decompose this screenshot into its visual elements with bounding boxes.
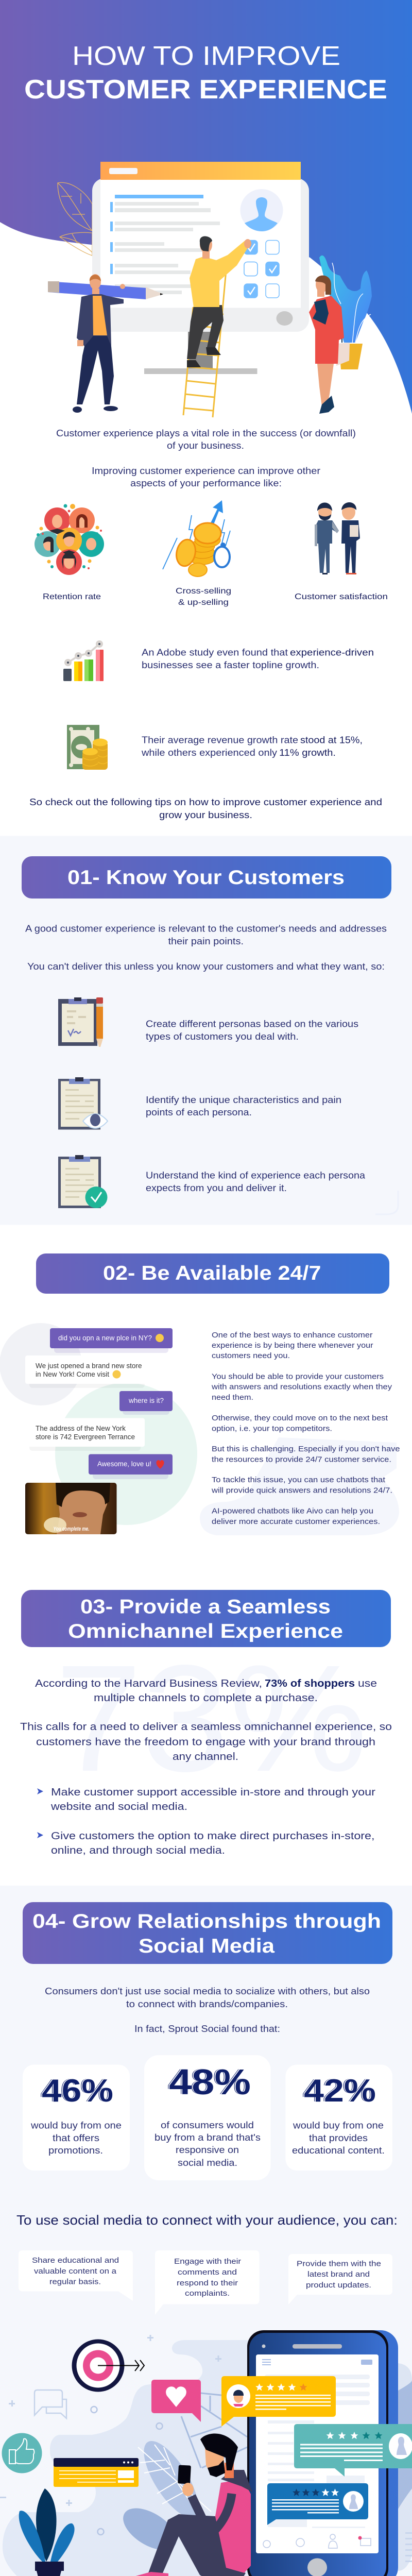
icon: cash and coins <box>67 725 108 770</box>
speech bubble: updates: Provide them with the <box>297 2260 381 2268</box>
text: revenue growth: while others experienced only <box>141 748 277 758</box>
text column: experience is by being there whenever your <box>212 1341 373 1350</box>
heading: 03- Provide a Seamless <box>80 1596 331 1618</box>
background shape <box>200 1437 399 1535</box>
stat card: 42%: 42% <box>304 2073 376 2109</box>
intro text: Consumers don't just use social media to socialize with others, but also <box>45 1986 370 1996</box>
stat card: 48% <box>144 2055 271 2180</box>
monitor base <box>144 368 258 374</box>
stat card: 48%: buy from a brand that's <box>154 2132 261 2143</box>
metric labels: Customer satisfaction <box>295 592 388 601</box>
phone <box>247 2330 398 2576</box>
text column: customers need you. <box>212 1351 290 1360</box>
title <box>24 41 387 105</box>
intro text: 73% of shoppers <box>265 1678 355 1689</box>
section background <box>0 1886 412 2576</box>
stat card: 46%: would buy from one <box>30 2121 122 2131</box>
text: create personas: types of customers you deal with. <box>146 1031 299 1042</box>
heart speech bubble <box>151 2380 201 2422</box>
speech bubble: share content <box>19 2250 133 2301</box>
chat bubble: awesome <box>89 1454 173 1479</box>
stat card: 48%: of consumers would <box>161 2120 254 2130</box>
blue review bubble <box>267 2483 368 2525</box>
thumbs up icon <box>2 2433 42 2473</box>
text: adobe study <box>142 647 374 670</box>
intro text <box>20 1678 392 1762</box>
heading <box>21 1590 391 1647</box>
teal review bubble <box>294 2424 412 2477</box>
intro text: In fact, Sprout Social found that: <box>134 2024 280 2034</box>
bullet: direct purchases <box>37 1831 375 1856</box>
illustration: monitor survey <box>92 162 309 332</box>
text column: To tackle this issue, you can use chatbots that <box>212 1476 386 1484</box>
stat card: 48%: 48% <box>169 2062 251 2102</box>
chat bubble: address: store is 742 Evergreen Terrance <box>36 1432 135 1440</box>
panel: 03 seamless omnichannel <box>20 1590 392 1856</box>
stat card: 42%: educational content. <box>292 2145 385 2156</box>
intro text: aspects of your performance like: <box>130 478 282 488</box>
text: revenue growth: stood at 15%, <box>300 735 363 745</box>
heading: Social Media <box>139 1935 274 1957</box>
icon: retention rate customers <box>35 504 104 575</box>
speech bubble: updates <box>288 2254 392 2304</box>
text column: will provide quick answers and resolutions 24/7. <box>211 1486 392 1495</box>
text: revenue growth <box>141 735 363 758</box>
icon: clipboard with check <box>58 1155 107 1208</box>
stat card: 46%: promotions. <box>48 2145 103 2156</box>
bullet: customer support: website and social media. <box>50 1801 187 1812</box>
text column <box>211 1331 400 1526</box>
text column: One of the best ways to enhance customer <box>212 1331 373 1340</box>
monitor button <box>276 311 293 326</box>
intro text: You can't deliver this unless you know your customers and what they want, so: <box>27 961 385 972</box>
speech bubble: engage: comments and <box>178 2268 237 2277</box>
icon: coins and rising arrows <box>163 500 230 577</box>
speech bubble: share content: valuable content on a <box>34 2267 117 2276</box>
intro text: This calls for a need to deliver a seamless omnichannel experience, so <box>20 1721 392 1733</box>
text: check out tips: grow your business. <box>159 810 252 820</box>
hero gradient shape <box>0 0 412 414</box>
text: understand experience: expects from you and deliver it. <box>146 1183 287 1193</box>
chat bubble: question <box>50 1328 173 1353</box>
title: CUSTOMER EXPERIENCE <box>24 75 387 105</box>
stat card: 46%: 46% <box>42 2073 113 2109</box>
chat outline icon <box>35 2390 66 2418</box>
intro text: multiple channels to complete a purchase. <box>94 1692 318 1704</box>
metric labels: Retention rate <box>43 592 101 601</box>
speech bubble: engage: respond to their <box>177 2279 238 2287</box>
text column: You should be able to provide your customers <box>212 1372 384 1381</box>
bullet: direct purchases: online, and through social media. <box>51 1845 225 1856</box>
chat bubble: where: where is it? <box>128 1396 164 1404</box>
chat bubble: answer: We just opened a brand new store <box>36 1361 142 1369</box>
intro text: customers have the freedom to engage with your brand through <box>36 1736 375 1748</box>
intro text: Customer experience plays a vital role in the success (or downfall) <box>56 428 356 438</box>
icon: bar chart growth <box>63 640 104 681</box>
stat card: 42% <box>285 2065 392 2171</box>
chat bubble: where <box>119 1391 173 1415</box>
stat card: 46%: that offers <box>53 2133 99 2143</box>
background blobs <box>3 2340 412 2576</box>
speech bubble: share content: Share educational and <box>32 2256 119 2265</box>
speech bubble: updates: product updates. <box>306 2281 371 2290</box>
speech bubble: engage <box>155 2250 260 2315</box>
chat bubble: answer <box>25 1355 149 1388</box>
heading: 02- Be Available 24/7 <box>103 1262 321 1284</box>
panel: 04 grow relationships <box>0 1886 412 2576</box>
heading <box>22 856 391 899</box>
stat card: 42%: that provides <box>309 2133 368 2143</box>
text: create personas: Create different personas based on the various <box>146 1019 358 1029</box>
background number 73%: 73% <box>55 1633 368 1803</box>
heading: 04- Grow Relationships through <box>32 1910 381 1933</box>
chat bubble: awesome: Awesome, love u! <box>97 1460 151 1468</box>
text: understand experience: Understand the kind of experience each persona <box>146 1171 366 1181</box>
bullet: customer support: Make customer support accessible in-store and through your <box>51 1787 375 1798</box>
text column: But this is challenging. Especially if you don't have <box>212 1445 400 1453</box>
text: revenue growth: Their average revenue growth rate <box>142 735 298 745</box>
text column: Otherwise, they could move on to the next best <box>212 1414 388 1422</box>
text column: deliver more accurate customer experiences. <box>212 1517 380 1526</box>
icon: two businessmen talking <box>315 502 360 574</box>
heading: Omnichannel Experience <box>68 1620 343 1642</box>
intro text <box>56 428 356 488</box>
intro text: According to the Harvard Business Review, <box>35 1678 262 1689</box>
section background <box>0 836 412 1225</box>
panel: hero header <box>0 0 412 417</box>
panel: 02 be available 24/7 <box>0 1253 400 1535</box>
intro text: Improving customer experience can improve other <box>92 466 320 476</box>
yellow review bubble <box>221 2376 336 2427</box>
illustration: man on ladder <box>183 236 251 417</box>
text: identify characteristics: points of each persona. <box>146 1107 252 1117</box>
chat image <box>25 1483 116 1534</box>
text: identify characteristics <box>146 1095 341 1117</box>
chat bubble: answer: in New York! Come visit <box>36 1370 109 1378</box>
intro text: use <box>358 1678 377 1689</box>
chat bubble: address: The address of the New York <box>36 1424 126 1432</box>
heading <box>23 1902 392 1964</box>
chat bubble: address <box>25 1418 145 1451</box>
intro text: any channel. <box>173 1751 238 1762</box>
text: identify characteristics: Identify the unique characteristics and pain <box>146 1095 341 1105</box>
intro text: A good customer experience is relevant to the customer's needs and addresses <box>25 923 387 934</box>
text column: the resources to provide 24/7 customer service. <box>212 1455 391 1464</box>
text column: need them. <box>212 1393 253 1402</box>
stat card: 48%: social media. <box>178 2158 237 2168</box>
text: revenue growth: 11% growth. <box>279 748 336 758</box>
target and arrow <box>72 2339 144 2392</box>
text: check out tips <box>29 797 382 820</box>
illustration: man with pencil <box>48 274 163 413</box>
metric labels: & up-selling <box>178 598 229 607</box>
title: HOW TO IMPROVE <box>72 41 340 71</box>
text column: AI-powered chatbots like Aivo can help you <box>212 1506 373 1516</box>
speech bubble: share content: regular basis. <box>49 2277 101 2286</box>
seated man with phone <box>126 2434 252 2576</box>
stat card: 48%: responsive on <box>176 2145 239 2155</box>
bullet: direct purchases: Give customers the option to make direct purchases in-store, <box>51 1831 375 1842</box>
panel: 01 know your customers <box>0 836 412 1225</box>
speech bubble: engage: Engage with their <box>174 2257 241 2266</box>
chat conversation <box>25 1328 173 1534</box>
text: check out tips: So check out the following tips on how to improve customer experience and <box>29 797 382 807</box>
metric labels: Cross-selling <box>176 587 231 596</box>
illustration: woman with plant <box>309 256 372 414</box>
monitor stand <box>188 332 213 368</box>
stat card: 46% <box>23 2065 130 2171</box>
text: create personas <box>146 1019 358 1042</box>
text column: with answers and resolutions exactly when they <box>211 1383 392 1391</box>
text: understand experience <box>146 1171 366 1193</box>
text column: option, i.e. your top competitors. <box>212 1424 332 1433</box>
intro text: of your business. <box>167 440 244 451</box>
chat bubble: question: did you opn a new plce in NY? <box>58 1333 152 1342</box>
text: adobe study: An Adobe study even found that <box>142 647 288 657</box>
decorative leaves <box>116 2393 247 2558</box>
intro text: to connect with brands/companies. <box>126 1999 288 2009</box>
icon: clipboard with pencil <box>58 997 103 1047</box>
intro text <box>25 923 387 972</box>
intro text <box>45 1986 370 2034</box>
speech bubble: engage: complaints. <box>185 2289 230 2298</box>
intro text: their pain points. <box>168 936 244 946</box>
subheading: To use social media to connect with your audience, you can: <box>16 2212 398 2228</box>
text: adobe study: businesses see a faster topline growth. <box>142 660 319 670</box>
text: adobe study: experience-driven <box>290 647 374 657</box>
bullet: customer support <box>37 1787 375 1812</box>
speech bubble: updates: latest brand and <box>307 2270 370 2279</box>
chat image: You complete me. <box>54 1526 90 1532</box>
icon: clipboard with eye <box>58 1077 108 1129</box>
icon: outline leaves <box>58 182 92 256</box>
potted plant <box>19 2488 75 2576</box>
illustration: man reviewing on phone <box>0 2330 412 2576</box>
yellow web card <box>54 2458 139 2487</box>
heading: 01- Know Your Customers <box>67 867 345 889</box>
metric labels <box>43 587 388 607</box>
stat card: 42%: would buy from one <box>293 2121 384 2131</box>
heading <box>36 1253 389 1294</box>
